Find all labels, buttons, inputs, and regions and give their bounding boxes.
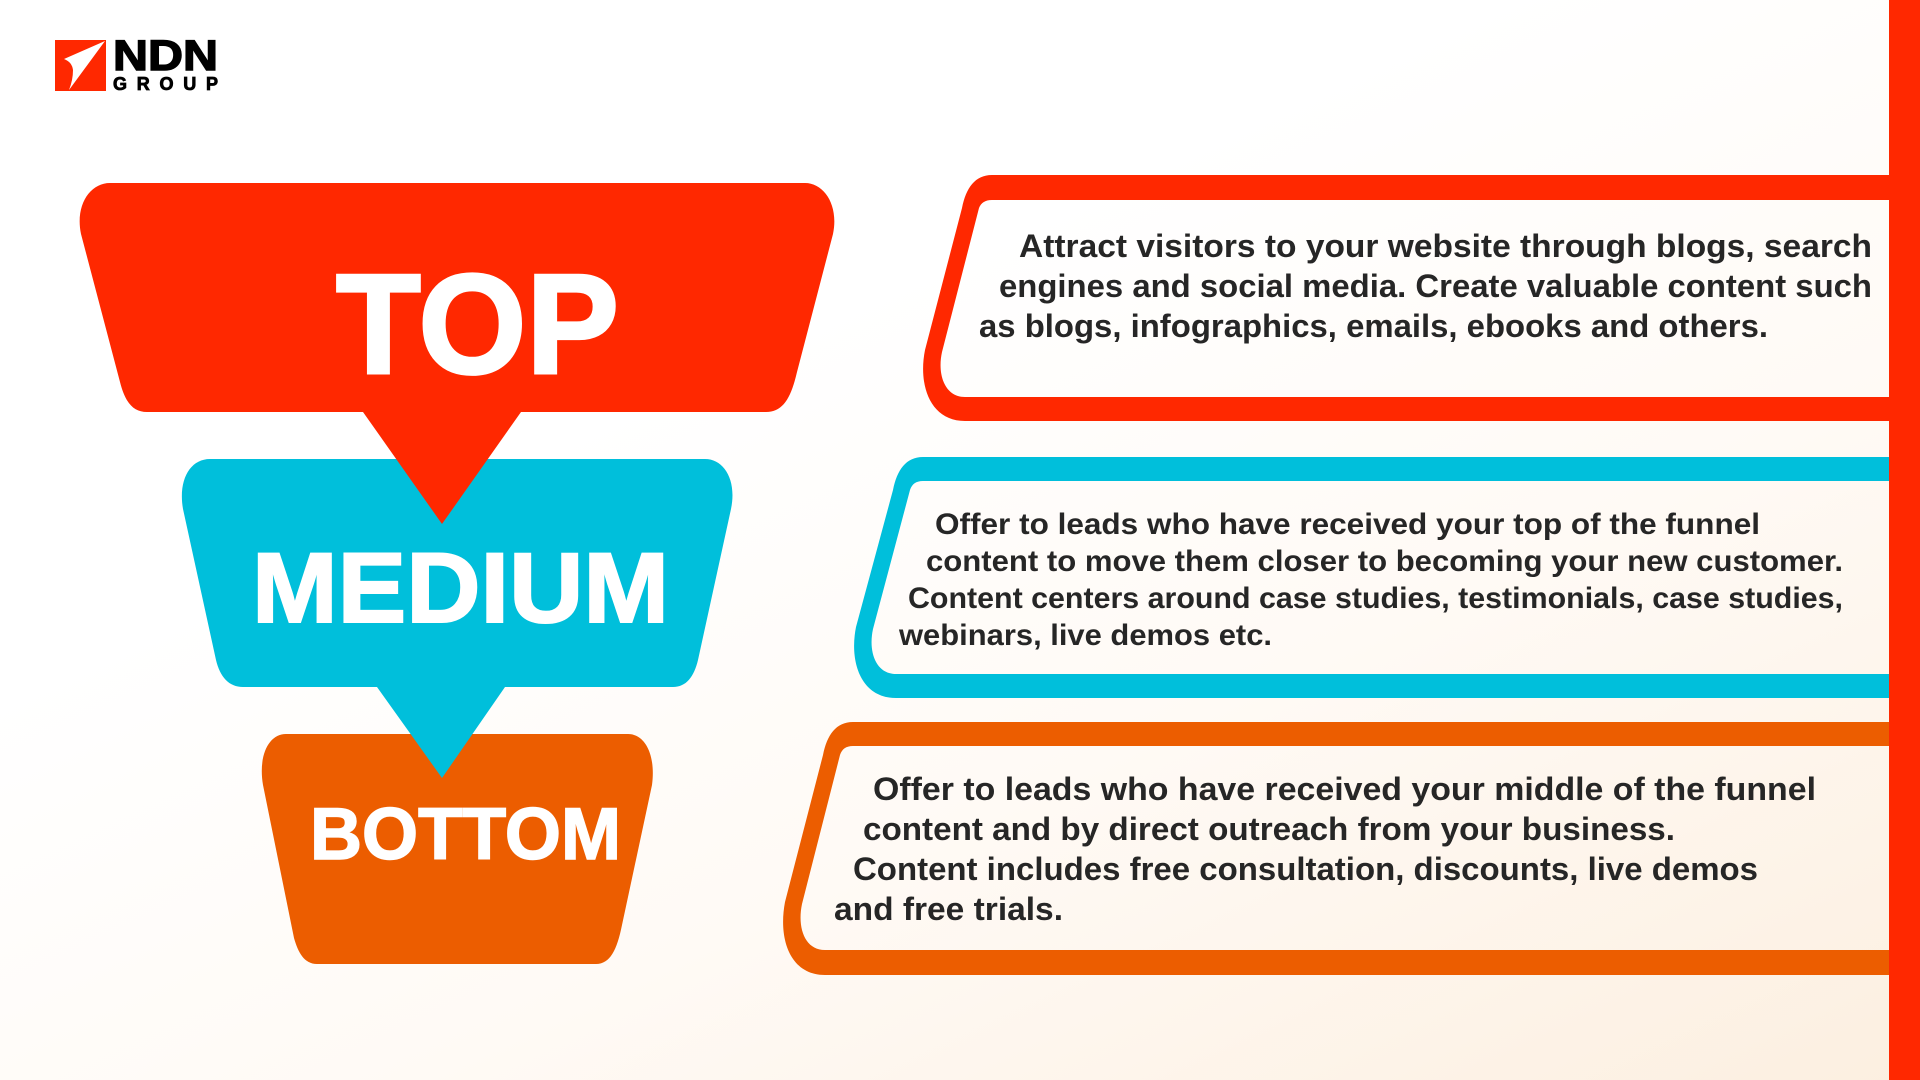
text: medium description: Offer to leads who have received your top of the funnel	[935, 508, 1760, 541]
panel: bottom of funnel description	[783, 722, 1889, 975]
logo: NDN Group	[55, 32, 218, 94]
text: bottom description: Content includes free consultation, discounts, live demos	[853, 851, 1758, 887]
panel: medium of funnel description	[854, 457, 1889, 698]
text: bottom description	[834, 771, 1816, 927]
text: medium description: Content centers around case studies, testimonials, case studies,	[908, 582, 1843, 615]
text: top description: as blogs, infographics, emails, ebooks and others.	[979, 308, 1768, 344]
logo wordmark: NDN	[113, 32, 218, 80]
label: TOP: TOP	[336, 245, 619, 404]
text: top description: Attract visitors to your website through blogs, search	[1019, 228, 1872, 264]
text: bottom description: content and by direct outreach from your business.	[863, 811, 1675, 847]
right edge bar	[1889, 0, 1920, 1080]
logo subtitle: GROUP	[113, 74, 218, 94]
label: MEDIUM: MEDIUM	[252, 532, 669, 643]
funnel stage: medium	[182, 459, 732, 778]
text: medium description: content to move them closer to becoming your new customer.	[926, 545, 1843, 578]
funnel stage: top	[80, 183, 834, 524]
panel: top of funnel description	[923, 175, 1889, 421]
funnel stage: bottom	[262, 734, 653, 964]
icon: paper plane logo mark	[55, 40, 106, 91]
text: top description	[979, 228, 1872, 344]
text: medium description: webinars, live demos etc.	[898, 619, 1272, 652]
text: bottom description: Offer to leads who have received your middle of the funnel	[873, 771, 1816, 807]
text: bottom description: and free trials.	[834, 891, 1063, 927]
text: top description: engines and social media. Create valuable content such	[999, 268, 1872, 304]
text: medium description	[898, 508, 1843, 652]
label: BOTTOM: BOTTOM	[310, 794, 621, 875]
